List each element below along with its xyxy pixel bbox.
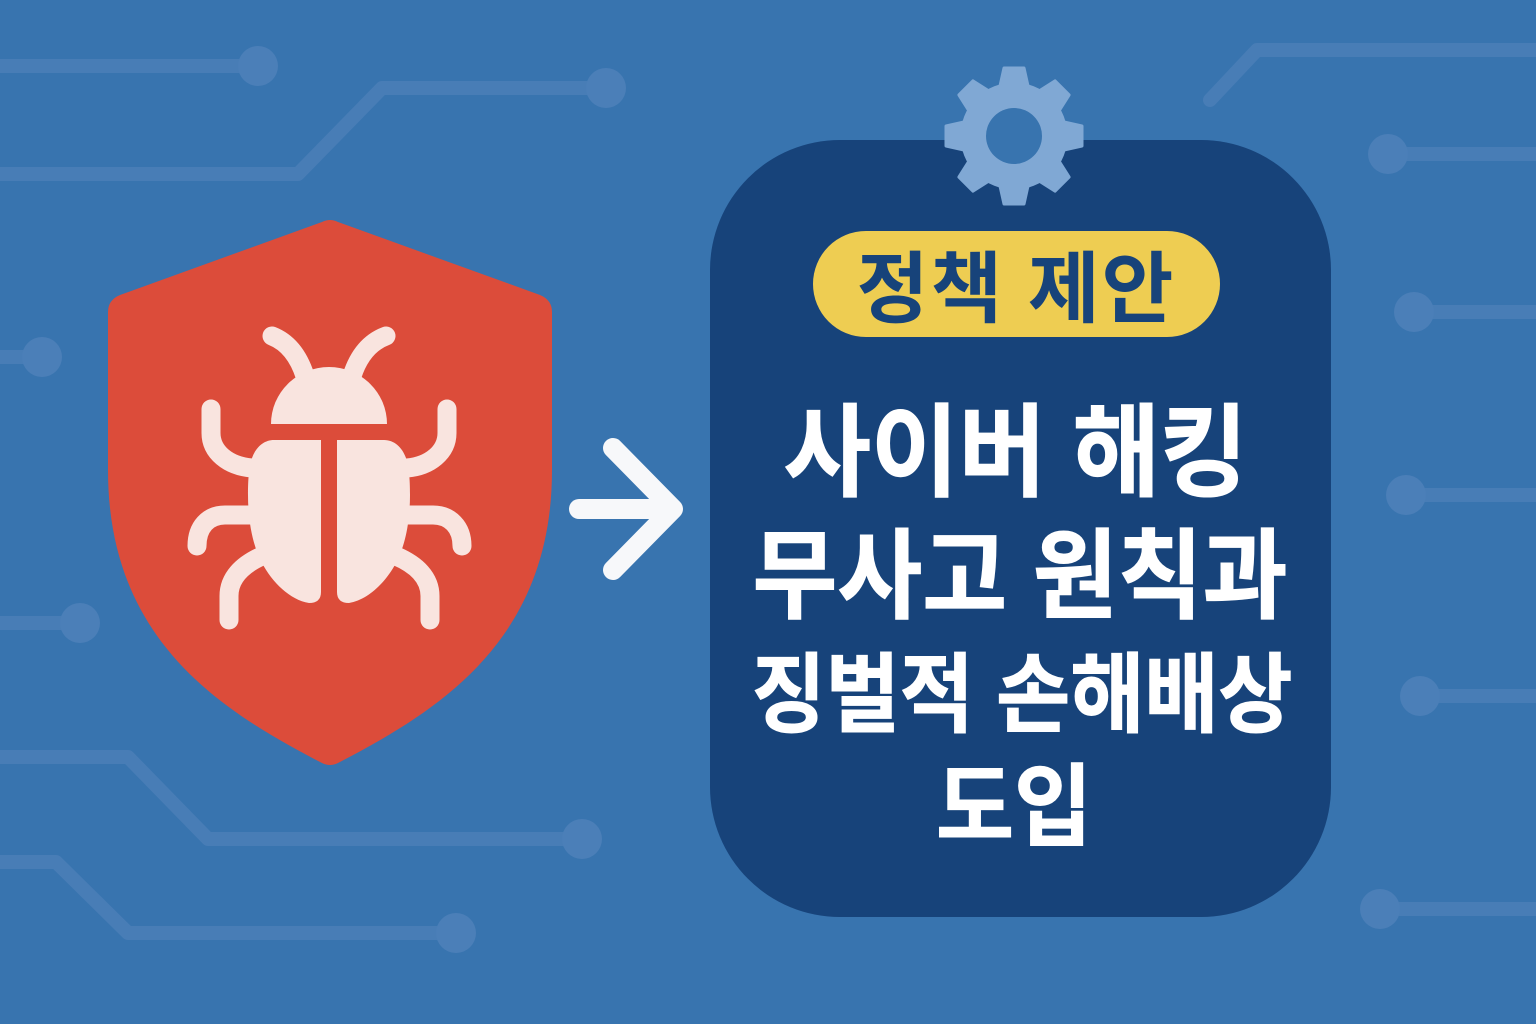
title: 무사고 원칙과: [752, 521, 1288, 631]
title: 사이버 해킹: [784, 398, 1248, 510]
arrow: [579, 448, 673, 570]
title: 도입: [936, 758, 1092, 858]
badge: 정책 제안: 정책 제안: [857, 245, 1175, 333]
title: 징벌적 손해배상: [752, 647, 1292, 744]
title: [752, 398, 1292, 858]
icon: bug: [197, 336, 462, 620]
panel: policy proposal: [710, 68, 1331, 917]
badge: 정책 제안: [813, 231, 1220, 337]
icon: gear: [946, 68, 1082, 204]
icon: shield with bug: [108, 220, 552, 765]
